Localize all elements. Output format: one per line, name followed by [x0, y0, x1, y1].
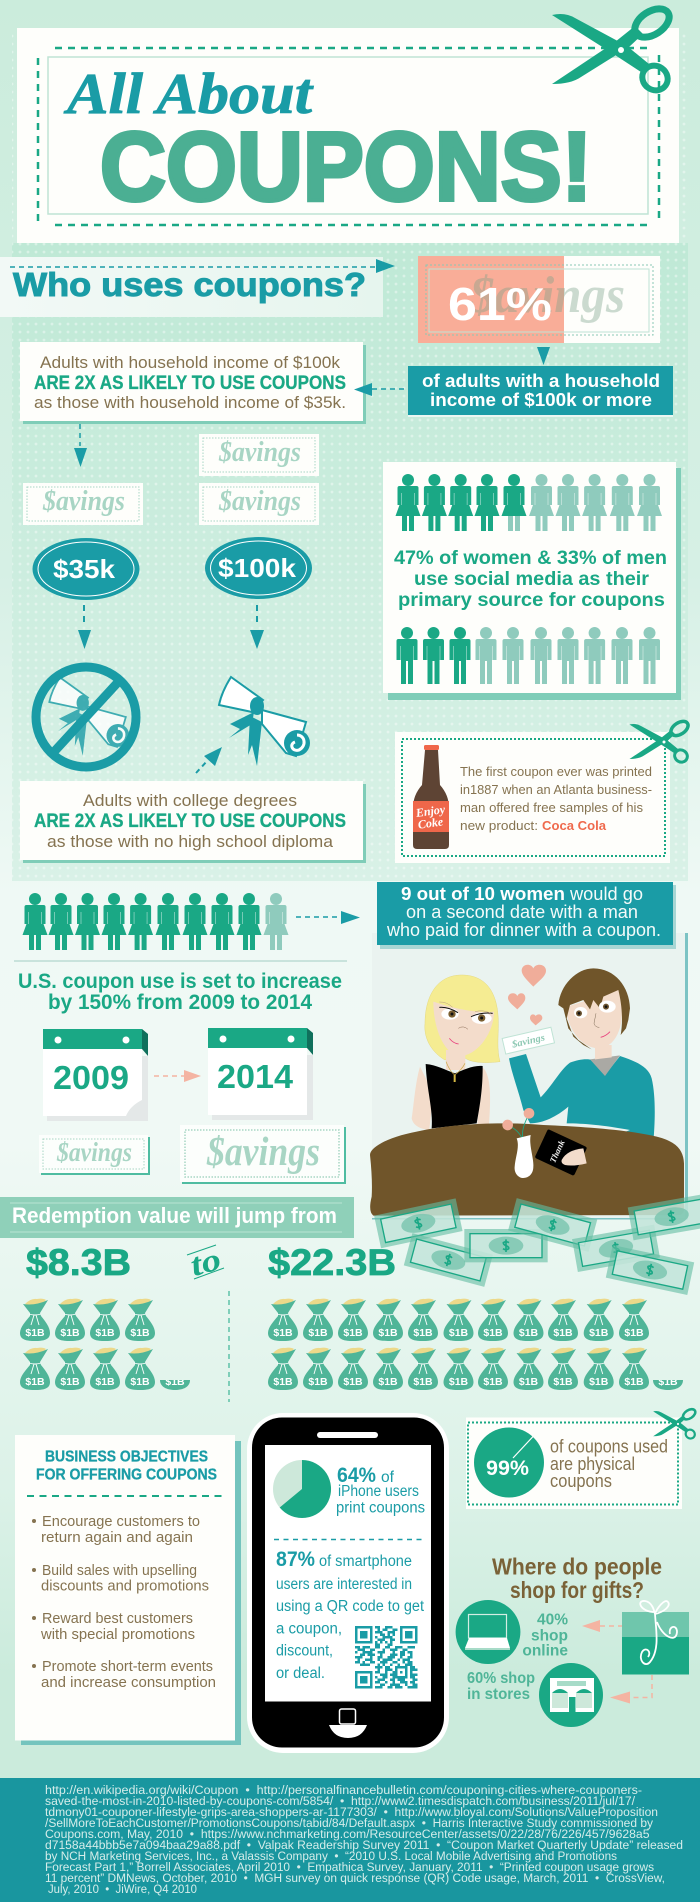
icon: laptop: [456, 1600, 520, 1664]
money bags: $22.3B: $1B: [449, 1376, 469, 1388]
pie chart: 99%: [474, 1428, 544, 1498]
dotted background panel: [12, 32, 688, 881]
arrow: gift to laptop: [582, 1620, 625, 1632]
title: All About: All About: [64, 61, 314, 126]
stat: 87% smartphone users: of smartphone: [319, 1553, 412, 1570]
money bags: $22.3B: $1B: [624, 1376, 644, 1388]
business objectives list: discounts and promotions: [41, 1578, 209, 1594]
heading: where do people shop: Where do people: [492, 1554, 662, 1580]
coca cola text: The first coupon ever was printed: [460, 764, 652, 779]
arrow: gift to store: [610, 1675, 652, 1704]
savings coupon small: $avings: [56, 1137, 132, 1167]
money bags: $8.3B: $1B: [130, 1327, 150, 1339]
money bags: $22.3B: $1B: [483, 1327, 503, 1339]
money bags: $8.3B: $1B: [25, 1327, 45, 1339]
stat: 60% shop in stores: 60% shop: [467, 1670, 535, 1687]
stat: physical coupons text: are physical: [550, 1454, 635, 1474]
money bags: $8.3B: $1B: [95, 1376, 115, 1388]
coca cola text: [460, 764, 652, 833]
heading: where do people shop: shop for gifts?: [510, 1577, 644, 1603]
coca cola text: man offered free samples of his: [460, 800, 643, 815]
pie chart: 64%: [273, 1460, 331, 1518]
panel: college degrees: [20, 781, 366, 863]
social media text: use social media as their: [414, 569, 650, 590]
coca cola text: in1887 when an Atlanta business-: [460, 782, 652, 797]
label: to: to: [186, 1240, 225, 1283]
icon: small scissors: [653, 1407, 697, 1440]
illustration: check presenter and hand: Thank: [547, 1138, 567, 1164]
money bags: $22.3B: $1B: [273, 1376, 293, 1388]
value: $22.3B: $22.3B: [268, 1242, 396, 1283]
stat: 87% smartphone users: [276, 1548, 425, 1682]
sources text: tdmony01-couponer-lifestyle-grips-area-shoppers-ar-1177303/ • http://www.bloyal.com/Solutions/ValueProposition: [45, 1805, 658, 1819]
panel: college degrees: as those with no high school diploma: [47, 832, 334, 851]
heading: where do people shop: [492, 1554, 662, 1603]
sources text: /SellMoreToEachCustomer/PromotionsCoupons/tabid/84/Default.aspx • Harris Interactive Study commissioned by: [45, 1816, 654, 1830]
business objectives list: Encourage customers to: [42, 1513, 200, 1530]
stat: 64% iPhone users: iPhone users: [338, 1483, 419, 1500]
stat: physical coupons text: of coupons used: [550, 1436, 668, 1456]
stat: 87% smartphone users: discount,: [276, 1642, 333, 1660]
callout: 9 out of 10 women: would go: [569, 884, 643, 904]
money bags: $22.3B: $1B: [624, 1327, 644, 1339]
calendar: 2014: 2014: [217, 1058, 294, 1095]
savings coupon left: $avings: [42, 485, 125, 517]
value: $8.3B: $8.3B: [26, 1242, 131, 1283]
men pictogram row: [396, 627, 660, 684]
footer: sources: [0, 1778, 700, 1902]
sources text: 11 percent” DMNews, October, 2010 • MGH survey on quick response (QR) Code usage, March, 2011 • CrossView,: [45, 1871, 665, 1885]
arrow: to dating callout: [296, 911, 360, 924]
illustration: check presenter and hand: [535, 1129, 587, 1176]
stat: 40% shop online: 40%: [537, 1612, 568, 1628]
heading band: who uses coupons: [0, 257, 395, 317]
pie chart: 99%: 99%: [486, 1457, 529, 1480]
panel: 99% physical coupons: [466, 1407, 697, 1509]
heading band: who uses coupons: Who uses coupons?: [13, 266, 366, 303]
illustration: woman: [412, 975, 500, 1129]
money bags: $22.3B: $1B: [658, 1376, 678, 1388]
calendar: 2009: 2009: [53, 1059, 129, 1096]
money bags: $22.3B: $1B: [378, 1327, 398, 1339]
stat: 87% smartphone users: 87%: [276, 1548, 315, 1571]
illustration: couple at table: [370, 965, 684, 1216]
arrow: $35k down: [78, 605, 91, 649]
business objectives list: Promote short-term events: [42, 1658, 213, 1675]
money bags: $22.3B: $1B: [519, 1327, 539, 1339]
social media text: primary source for coupons: [398, 590, 665, 611]
savings coupon small: [39, 1135, 150, 1175]
money bags: $22.3B: $1B: [553, 1376, 573, 1388]
business objectives list: return again and again: [41, 1529, 193, 1546]
business objectives list: Reward best customers: [42, 1610, 193, 1627]
phone: [247, 1413, 449, 1753]
panel: coca cola fact: [395, 719, 691, 863]
illustration: vase and flowers: [502, 1108, 534, 1178]
sources text: by NCH Marketing Services, Inc., a Valassis Company • “2010 U.S. Local Mobile Advertising and Promotions: [45, 1849, 617, 1863]
icon: no diploma: [36, 667, 136, 767]
arrow: down to $35k: [74, 424, 87, 467]
icon: small scissors: [630, 719, 691, 765]
money bags: $8.3B: $1B: [60, 1376, 80, 1388]
money bags: $22.3B: $1B: [343, 1376, 363, 1388]
sources text: Forecast Part 1,” Borrell Associates, April 2010 • Empathica Survey, January, 2011 • “Printed coupon usage grows: [45, 1860, 654, 1874]
calendar: 2009: [43, 1029, 148, 1121]
money bags: $22.3B: $1B: [308, 1376, 328, 1388]
stat: physical coupons text: [550, 1436, 668, 1491]
coupon: 61% stat: [418, 256, 660, 343]
divider: [14, 960, 347, 962]
band: redemption value: [0, 1197, 354, 1238]
coupon: 61% stat: 61%: [448, 278, 552, 330]
badge: $35k: [32, 538, 140, 600]
arrow: left to income panel: [354, 383, 404, 396]
sources text: d7158a44bbb5e7a094baa29a88.pdf • Valpak Readership Survey 2011 • “Coupon Market Quarterly Update” released: [45, 1838, 683, 1852]
heading: coupon use increase: [18, 970, 342, 1014]
arrow: diagonal to diploma: [196, 747, 222, 773]
title coupon panel: [17, 3, 679, 243]
panel: income likelihood: ARE 2X AS LIKELY TO USE COUPONS: [34, 373, 346, 394]
money bags: $8.3B: $1B: [25, 1376, 45, 1388]
money bags: $22.3B: $1B: [273, 1327, 293, 1339]
stat: 64% iPhone users: print coupons: [336, 1500, 425, 1516]
money bags: $22.3B: $1B: [413, 1376, 433, 1388]
stat: 60% shop in stores: [467, 1670, 535, 1703]
money bags: $8.3B: [20, 1299, 190, 1390]
sources text: Coupons.com, May, 2010 • https://www.nchmarketing.com/ResourceCenter/assets/0/22/28/76/226/457/9628a5: [45, 1827, 650, 1841]
calendar: 2014: [208, 1028, 313, 1120]
icon: bottle: Coke: [417, 814, 445, 832]
money bags: $22.3B: $1B: [519, 1376, 539, 1388]
panel: income likelihood: as those with household income of $35k.: [34, 394, 346, 412]
sources text: July, 2010 • JiWire, Q4 2010: [48, 1882, 197, 1896]
badge: $100k: [205, 537, 312, 599]
money bags: $22.3B: $1B: [308, 1327, 328, 1339]
business objectives list: and increase consumption: [41, 1674, 216, 1691]
icon: bottle: Enjoy: [414, 802, 447, 820]
qr code: [355, 1626, 418, 1688]
icon: store: [539, 1663, 603, 1727]
savings coupon large: $avings: [206, 1128, 320, 1174]
money bags: $22.3B: $1B: [449, 1327, 469, 1339]
panel: couple illustration: [370, 933, 700, 1295]
money bags: $22.3B: $1B: [483, 1376, 503, 1388]
badge: $35k: $35k: [53, 554, 116, 584]
callout: of adults with household income: income of $100k or more: [430, 390, 652, 410]
panel: income likelihood: Adults with household income of $100k: [40, 354, 341, 372]
callout: 9 out of 10 women: 9 out of 10 women: [401, 884, 565, 904]
stat: 87% smartphone users: a coupon,: [276, 1620, 342, 1638]
coca cola text: new product:: [460, 818, 538, 833]
band: redemption value: Redemption value will jump from: [12, 1203, 337, 1228]
savings coupon left: [23, 483, 143, 525]
stat: 40% shop online: shop: [531, 1628, 568, 1644]
savings coupon large: [180, 1125, 346, 1184]
stat: 64% iPhone users: [336, 1464, 425, 1516]
women pictogram row: [396, 474, 662, 531]
stat: 64% iPhone users: of: [381, 1469, 395, 1486]
panel: college degrees: Adults with college degrees: [83, 791, 297, 810]
illustration: savings coupon in hand: $avings: [510, 1032, 546, 1051]
business objectives list: Build sales with upselling: [42, 1562, 197, 1579]
divider: dashed vertical: [228, 1291, 230, 1402]
business objectives heading: BUSINESS OBJECTIVES: [45, 1448, 208, 1466]
heading: coupon use increase: by 150% from 2009 to 2014: [48, 991, 312, 1014]
stat: 60% shop in stores: in stores: [467, 1686, 530, 1703]
money bags: $22.3B: $1B: [413, 1327, 433, 1339]
stat: 87% smartphone users: users are interested in: [276, 1576, 412, 1593]
women pictogram: 9 out of 10: [22, 893, 288, 950]
panel: income likelihood: [20, 342, 366, 424]
callout: 9 out of 10 women: [377, 882, 676, 949]
title: COUPONS!: COUPONS!: [100, 112, 592, 221]
illustration: table: [370, 1123, 684, 1216]
money bills: [374, 1193, 700, 1295]
panel: college degrees: ARE 2X AS LIKELY TO USE COUPONS: [34, 811, 346, 832]
heading: coupon use increase: U.S. coupon use is set to increase: [18, 970, 342, 993]
business objectives heading: [36, 1448, 217, 1484]
coupon: 61% stat: $avings: [469, 267, 625, 324]
stat: 87% smartphone users: using a QR code to get: [276, 1598, 425, 1615]
sources text: http://en.wikipedia.org/wiki/Coupon • http://personalfinancebulletin.com/couponing-cities-where-couponers-: [45, 1783, 642, 1797]
business objectives heading: FOR OFFERING COUPONS: [36, 1466, 217, 1484]
social media text: [394, 548, 667, 611]
savings coupon top: $avings: [218, 436, 301, 468]
arrow: 2009 to 2014: [154, 1070, 201, 1082]
savings coupon top: [199, 434, 319, 476]
money bags: $22.3B: [268, 1299, 683, 1390]
illustration: man: [509, 968, 655, 1163]
icon: bottle: [413, 745, 449, 849]
icon: diploma: [219, 677, 310, 766]
stat: 64% iPhone users: 64%: [337, 1464, 376, 1487]
stat: physical coupons text: coupons: [550, 1471, 612, 1491]
badge: $100k: $100k: [218, 553, 297, 583]
savings coupon right: $avings: [218, 485, 301, 517]
sources text: saved-the-most-in-2010-listed-by-coupons-com/5854/ • http://www2.timesdispatch.com/business/2011/jul/17/: [45, 1794, 636, 1808]
money bags: $8.3B: $1B: [60, 1327, 80, 1339]
money bags: $8.3B: $1B: [165, 1376, 185, 1388]
panel: business objectives: [15, 1435, 241, 1745]
sources text: [45, 1783, 683, 1896]
panel: social media: [383, 462, 681, 700]
money bags: $22.3B: $1B: [589, 1376, 609, 1388]
social media text: 47% of women & 33% of men: [394, 548, 667, 569]
illustration: savings coupon in hand: [502, 1027, 554, 1054]
stat: 40% shop online: [522, 1612, 568, 1660]
business objectives list: with special promotions: [40, 1626, 195, 1643]
money bags: $8.3B: $1B: [130, 1376, 150, 1388]
callout: of adults with household income: [408, 366, 673, 417]
business objectives list: [32, 1513, 216, 1691]
callout: 9 out of 10 women: who paid for dinner with a coupon.: [386, 920, 661, 940]
callout: of adults with household income: of adults with a household: [422, 371, 660, 391]
stat: 87% smartphone users: or deal.: [276, 1665, 325, 1682]
money bags: $22.3B: $1B: [589, 1327, 609, 1339]
stat: 40% shop online: online: [522, 1642, 568, 1660]
callout: 9 out of 10 women: on a second date with a man: [406, 902, 638, 922]
money bags: $22.3B: $1B: [378, 1376, 398, 1388]
illustration: hearts: [508, 965, 546, 1025]
money bags: $22.3B: $1B: [553, 1327, 573, 1339]
coca cola text: Coca Cola: [542, 818, 607, 833]
money bags: $22.3B: $1B: [343, 1327, 363, 1339]
arrow: $100k down: [250, 605, 264, 649]
icon: scissors: [552, 3, 674, 95]
icon: gift box: [622, 1601, 689, 1674]
savings coupon right: [199, 483, 319, 525]
money bags: $8.3B: $1B: [95, 1327, 115, 1339]
arrow: down to teal box: [537, 347, 550, 365]
